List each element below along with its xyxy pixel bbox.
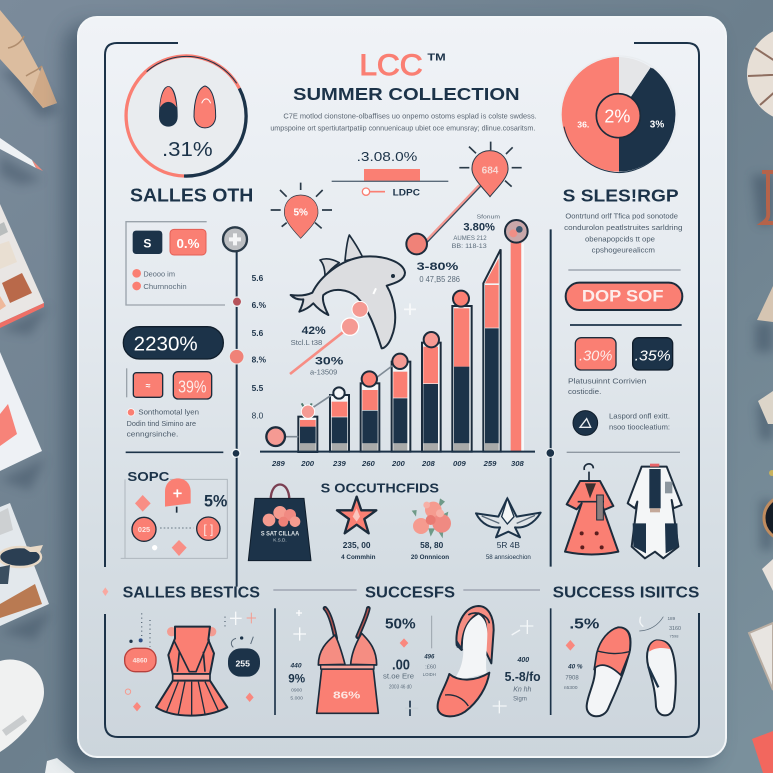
heel stats: 5.-8/fo [505,670,541,684]
left side props [0,10,75,773]
y axis labels [252,328,267,421]
bar 8 [511,240,524,452]
note: Sonthomotal lyen [138,410,199,417]
bar 6 [452,306,472,452]
intro text: C7E motlod cionstone-olbaffises uo onpemo ostoms esplad is colste swdess. [283,113,537,120]
bar chart [260,240,535,468]
icon: dolphin [291,235,405,348]
icon: shopping bag: K.S.D. [273,537,287,542]
intro text [270,113,537,132]
heading: sales group: S SLES!RGP [563,185,679,205]
right body text: condurolon peatlstruites sarldring [564,225,683,232]
tiles: ≈ [146,380,151,390]
prop shadows [752,175,773,550]
annotation: 42%: 42% [302,325,326,337]
x axis labels: 289 [271,459,285,468]
sandal stats: n5300 [564,685,578,691]
left top stats: 440 [289,662,302,669]
icon: navy badge [573,411,598,435]
divider [567,450,680,454]
left top stats [288,662,306,701]
x axis labels: 260 [361,459,375,468]
x axis labels: 009 [453,459,466,468]
navy value pill: 2230% [134,332,198,355]
badge: navy [228,648,260,677]
annotation: 3.80% [452,214,501,250]
x axis [260,449,535,455]
pie chart [561,56,677,173]
note: cenngrsinche. [127,432,178,439]
icon: red glasses [762,172,773,223]
sparkle [404,305,416,315]
button [566,283,682,310]
right body text: obenapopcids tt ope [585,236,655,243]
title: SUMMER COLLECTION [293,84,520,104]
sandal stats: 40 % [567,664,583,671]
annotation: 3.80%: 3.80% [463,222,496,234]
tile caption: costicdie. [568,389,601,396]
winged star caption: 5R 4B [497,540,520,550]
annotation: 3.80%: Sfonum [477,214,501,220]
navy tile [633,338,673,370]
right side props [747,26,773,773]
flowers caption: 58, 80 [420,540,444,550]
heel stats: Sigm [513,697,527,703]
mini bar: headline value: LDPC [393,187,421,197]
coral tile [575,338,616,370]
annotation: 3.80%: AUMES 212 [453,236,487,242]
zone: header and left column [126,49,537,587]
annotation: 3.80%: BB: 118-13 [452,244,487,250]
heading: sales: SALLES OTH [130,184,253,205]
coral sparkle [566,640,575,651]
annotation: 30% [310,355,343,377]
annotation: 3-80%: 3-80% [417,261,458,273]
legend: Deooo im [143,271,175,278]
icon: coral card [752,731,773,773]
panel: SOPC: [ ] [203,522,213,536]
decorative bits [125,612,256,711]
icon: small tube [45,758,75,773]
pie chart: 3% [650,119,664,130]
divider [463,588,540,592]
y axis labels: 5.6 [252,328,264,338]
annotation: 3-80% [417,261,461,284]
badge caption: nsoo tioocleatium: [609,424,670,431]
zone: upper right [404,56,683,567]
icon: map pin 684: 684 [482,165,499,176]
centre stats: st.oe Ere [383,674,414,681]
icon: white coat [628,464,682,558]
zone: bottom right [383,584,700,716]
zone: bottom left [102,584,455,716]
sandal stats: 7908 [565,676,579,682]
sparkle [404,303,416,315]
icon: white shoe [0,660,44,752]
tile caption: Platusuinnt Corrivien [568,378,646,385]
panel: SOPC: 5% [204,492,228,511]
x axis labels: 208 [421,459,435,468]
right divider line [548,229,554,567]
star caption [341,540,376,561]
icon: map pin 5% [271,183,332,238]
icon: curve annotation: 3160 [669,626,681,632]
tile caption [568,378,646,396]
shoe stats [423,654,436,677]
navy tile: S [143,236,151,250]
y axis labels: 6.% [252,300,267,310]
icon: card [758,391,773,424]
left top stats: 9% [288,672,306,685]
icon: colour wheel [747,26,773,122]
heading: occurrences: S OCCUTHCFIDS [321,481,439,496]
icon: shopping bag [248,484,311,561]
timeline nodes [223,227,247,587]
annotation: 42% [291,325,326,347]
outer frame lines [105,43,699,737]
centre stats: 2003 46 d0 [389,684,412,690]
left top stats: 0900 [291,688,302,694]
icon: flip flop [647,640,676,715]
bar 5 [422,343,441,452]
star caption: 4 Commhin [341,554,376,561]
right body text: cpshogeurealiccm [592,248,655,255]
heading: successes: SUCCESFS [365,584,455,601]
pie chart: 2% [604,106,630,127]
annotation: 30%: a-13509 [310,370,337,377]
bar 2 [330,395,349,452]
badge: coral: 4860 [133,658,148,665]
flowers [412,498,451,538]
mini bar: headline value [332,149,448,197]
intro text: umpspoine ort spertiutartpatiip connuenicaup ubiet oce emunsray; dlinue.cosaritsm. [270,125,535,132]
zone: chart [260,214,535,468]
icon: coral pill [194,86,216,128]
icon: makeup palette [0,204,44,328]
button: DOP SOF [582,287,663,306]
winged star caption: 58 annsioechion [486,554,531,561]
divider [273,588,357,592]
y axis labels [252,273,267,310]
heel stats: 400 [517,657,529,664]
gauge value: .31% [162,139,213,161]
trend line and nodes [266,220,528,446]
title [293,49,520,104]
divider [430,616,433,648]
sparkle coral [102,587,108,596]
annotation: 3-80%: 0 47,B5 286 [419,275,461,284]
flowers caption [411,540,449,561]
sandal stats [564,664,583,691]
title: LCC [359,49,423,82]
panel: SOPC [121,469,228,558]
heel stats: Kn hh [513,686,532,693]
x axis labels: 200 [391,459,405,468]
icon: navy pill [159,86,178,127]
title: TM [427,52,446,63]
badge caption: Laspord onfl exitt. [609,414,670,421]
icon: small frame [762,559,773,591]
centre stats: 50% [385,616,416,632]
note [127,409,199,439]
right body text [564,214,683,255]
icon: picture frame [749,623,773,690]
icon: curve annotation: 7598 [670,633,679,638]
divider [548,608,553,715]
note: Dodin tind Simino are [127,421,196,428]
icon: lipstick [0,10,57,108]
bar 7 [483,249,501,452]
star caption: 235, 00 [343,540,371,550]
icon: winged star [476,498,541,537]
legend: Churnnochin [143,284,187,291]
annotation: 30%: 30% [315,355,343,367]
legend [132,269,187,291]
icon: camisole top [317,608,378,713]
icon: pen [0,138,43,171]
icon: star [337,497,376,533]
divider [126,450,223,455]
divider [568,268,681,272]
panel: SOPC: 025 [138,525,150,534]
navy tile: .35% [635,349,671,365]
bar 3 [361,383,379,452]
badge: coral [125,648,156,672]
coral tile: 0.% [177,236,200,251]
zone: lower left [121,327,439,561]
x axis labels [271,459,524,468]
zone: lower right [411,325,682,561]
heading: success hits: SUCCESS ISIITCS [553,584,700,601]
x axis labels: 239 [332,459,346,468]
icon: map pin 684 [459,142,522,197]
icon: beige box [757,286,773,322]
navy value pill [123,327,223,359]
left top stats: 5.000 [290,695,303,701]
centre stats [383,616,418,716]
shoe stats: LOIDH [423,672,436,677]
panel: SOPC: SOPC [127,469,170,484]
node [546,449,555,457]
mini bar: headline value: .3.08.0% [357,149,417,164]
y axis labels: 8.% [252,355,267,365]
tiles: 39% [178,377,207,397]
icon: coral coat dress [565,464,618,554]
bar 1 [298,417,317,452]
pie chart: 36. [577,119,589,129]
icon: slide sandal [587,627,631,716]
trend arrow with nodes [290,301,368,374]
divider [272,608,277,715]
y axis labels: 8.0 [252,411,264,421]
pin line and node [406,185,480,254]
flowers caption: 20 Onnnicon [411,554,449,561]
icon: map pin 5%: 5% [293,208,308,219]
centre stats: .00 [392,657,410,673]
panel: small stats [126,222,225,305]
shoe stats: 496 [423,654,435,660]
heel stats [505,657,541,703]
icon: curve annotation: 189 [667,616,676,621]
node [232,449,240,457]
icon: palette with sunglasses [0,503,49,626]
prop shadows [0,70,60,640]
shoe stats: :£60 [425,664,436,670]
badge caption [609,414,670,431]
divider [570,322,682,327]
bar 4 [392,362,410,452]
annotation: 42%: Stcl.L t38 [291,340,322,347]
winged star caption [486,540,531,561]
right body text: Oontrtund orlf Tfica pod sonotode [565,214,678,221]
x axis labels: 200 [300,459,315,468]
badge: navy: 255 [235,659,250,669]
tiles [127,368,212,399]
icon: shopping bag: S SAT CILLAA [261,532,300,538]
timeline node [229,349,244,364]
icon: peplum dress [156,627,227,716]
heading: sales bestics: SALLES BESTICS [123,584,260,601]
donut gauge [126,56,247,176]
icon: booklet [0,352,42,471]
x axis labels: 308 [511,459,524,468]
sparkles [293,610,306,641]
x axis labels: 259 [483,459,497,468]
icon: curve annotation [639,616,681,638]
y axis labels: 5.5 [252,383,264,393]
stat .5%: .5% [569,616,599,632]
coral tile: .30% [579,349,612,365]
y axis labels: 5.6 [252,273,264,283]
icon: round glasses [764,470,773,540]
sparkles [493,620,533,713]
icon: camisole top: 86% [333,690,360,701]
icon: heeled sandal [438,606,494,716]
